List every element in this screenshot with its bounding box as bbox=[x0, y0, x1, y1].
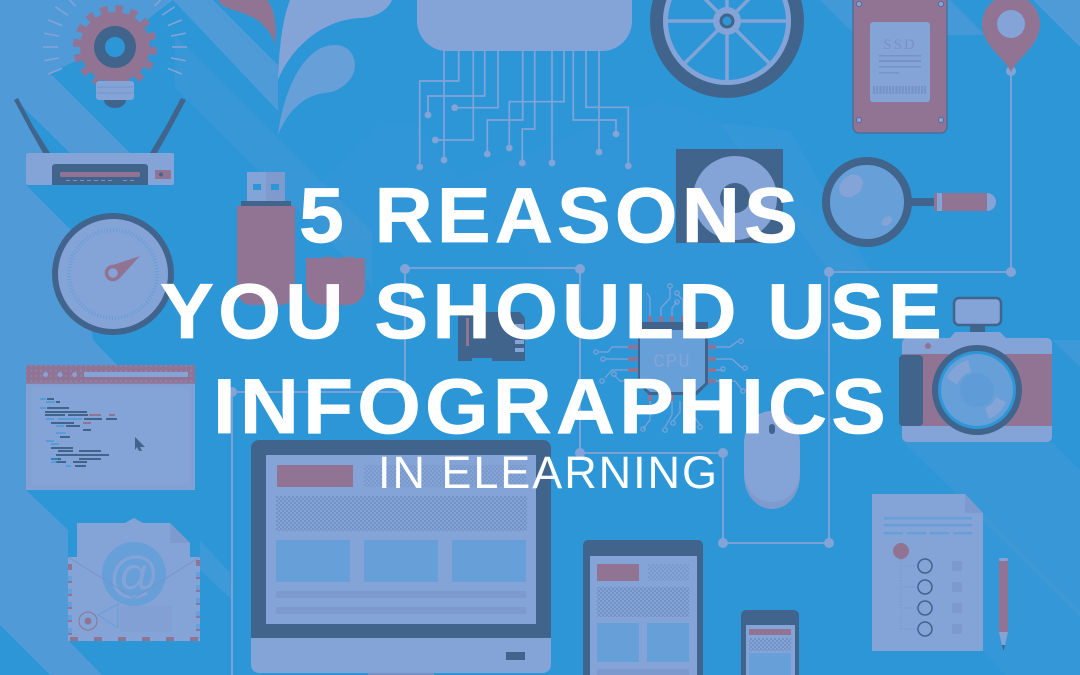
icon: wheel bbox=[656, 0, 798, 92]
title bbox=[160, 171, 946, 450]
icon: swirl leaves bbox=[218, 0, 392, 135]
icon: tablet bbox=[583, 540, 703, 675]
icon: usb drive bbox=[237, 172, 365, 305]
icon: quiz document bbox=[872, 494, 983, 651]
icon: smartphone bbox=[741, 610, 799, 675]
icon: ssd drive: SSD bbox=[883, 37, 917, 53]
icon: cpu chip: CPU bbox=[653, 351, 691, 373]
connector lines and nodes bbox=[227, 66, 1016, 675]
icon: email envelope: @ bbox=[109, 547, 159, 603]
icon: code browser window bbox=[26, 365, 195, 490]
icon: lightbulb gear bbox=[43, 0, 187, 108]
title line 2: YOU SHOULD USE bbox=[160, 267, 946, 355]
icon: speed gauge bbox=[55, 216, 171, 332]
title line 1: 5 REASONS bbox=[299, 171, 802, 259]
icon: micro sd card bbox=[458, 312, 525, 361]
icon: camera bbox=[899, 298, 1052, 442]
icon: cpu chip bbox=[594, 284, 747, 432]
title line 3: INFOGRAPHICS bbox=[213, 362, 890, 450]
icon: computer mouse bbox=[744, 411, 800, 509]
icon: map pin bbox=[982, 0, 1040, 72]
icon: wifi router bbox=[14, 98, 186, 185]
icon: magnifying glass bbox=[826, 161, 996, 243]
icon: ssd drive bbox=[853, 0, 947, 133]
icon: cloud with circuit lines bbox=[416, 0, 632, 170]
icon: compact disc bbox=[676, 149, 783, 243]
icon: desktop monitor bbox=[251, 440, 551, 675]
icon: email envelope bbox=[68, 518, 200, 641]
icon: pencil bbox=[999, 558, 1008, 650]
subtitle: IN ELEARNING bbox=[378, 447, 717, 498]
